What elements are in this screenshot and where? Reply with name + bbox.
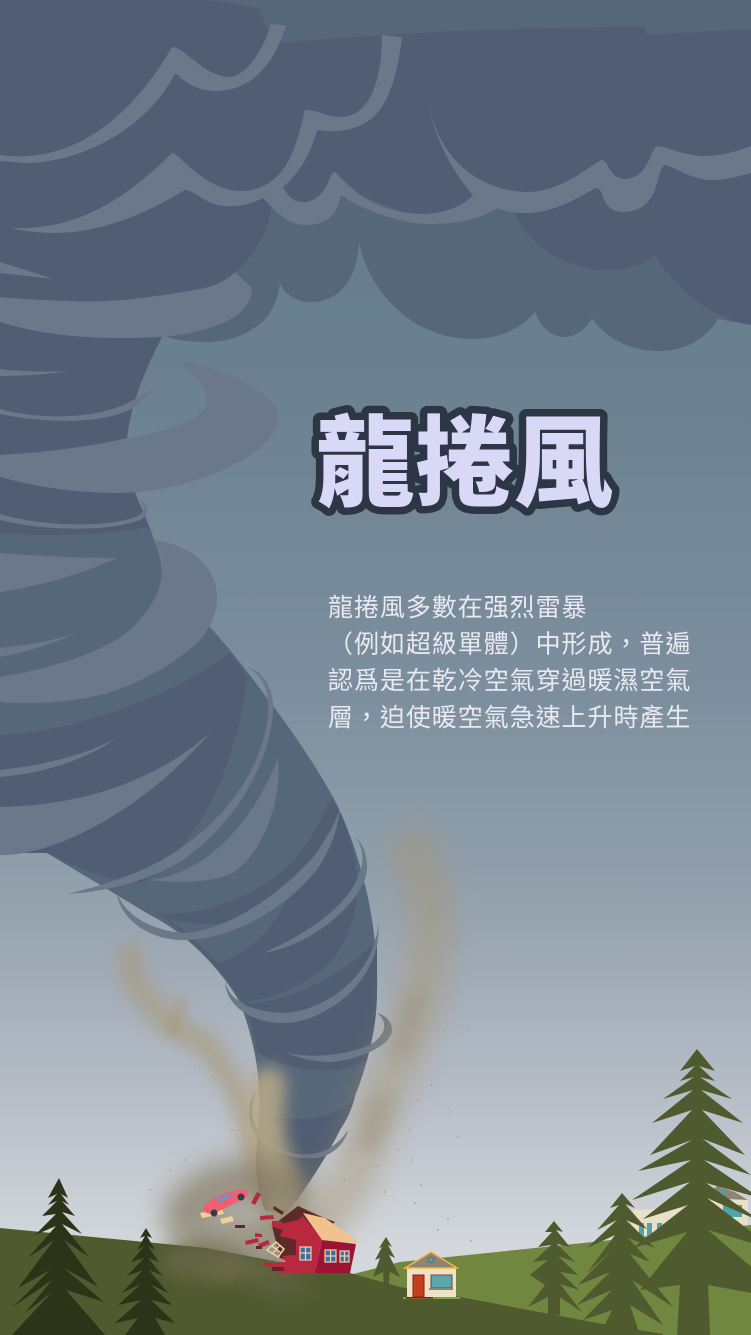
description text: （例如超級單體）中形成，普遍: [328, 630, 691, 658]
house interior: [272, 1206, 335, 1265]
funnel dark tip: [256, 1097, 355, 1215]
cloud base swirl band: [0, 272, 252, 338]
dust particles: [149, 841, 472, 1242]
storm cloud dark layer: [0, 0, 751, 325]
dark front hill: [0, 1228, 663, 1335]
description text: [328, 594, 691, 732]
swirl ring B: [117, 808, 340, 940]
flying bricks: [245, 1192, 288, 1270]
upper swirl disc: [0, 360, 278, 493]
small cottage: [403, 1252, 460, 1299]
cloud highlight ribbon: [10, 35, 751, 233]
second thin ring: [0, 500, 148, 529]
title: 龍捲風: [316, 408, 613, 519]
swirl ring C: [263, 837, 367, 953]
swirl ring A: [67, 667, 273, 894]
funnel wedge highlight: [0, 553, 117, 592]
swirl ring F: [249, 1090, 348, 1158]
ground smoke over hill: [160, 1242, 320, 1300]
description text: 認爲是在乾冷空氣穿過暖濕空氣: [328, 667, 691, 695]
funnel dark band A: [0, 653, 247, 883]
house roof: [303, 1213, 360, 1243]
tornado main funnel body: [0, 527, 377, 1215]
funnel thin wedge two: [0, 738, 117, 777]
tree: small green: [528, 1221, 582, 1315]
house right wall: [315, 1240, 356, 1273]
flying car: [200, 1190, 248, 1224]
cloud highlight crescent upper left: [0, 24, 286, 163]
tree: far left large: [12, 1178, 105, 1335]
house left wall: [270, 1216, 322, 1273]
description text: 層，迫使暖空氣急速上升時產生: [328, 704, 691, 732]
house windows: [300, 1247, 349, 1262]
funnel inner wedge: [165, 897, 287, 963]
tornado upper swirl thin wedge: [0, 369, 70, 376]
flying window: [267, 1242, 284, 1257]
description text: 龍捲風多數在强烈雷暴: [328, 594, 588, 622]
funnel wide highlight: [0, 730, 213, 855]
tree: large green: [632, 1049, 751, 1335]
background buildings: [630, 1186, 749, 1280]
tiny tree near house: [373, 1237, 400, 1290]
tree: medium green: [577, 1193, 673, 1335]
swirl ring D: [225, 923, 379, 1023]
destroyed red house: [235, 1192, 360, 1273]
upper thin ring: [0, 388, 152, 421]
cloud wedge highlight: [0, 262, 54, 279]
tree: left small: [115, 1228, 175, 1335]
funnel dark band B: [157, 800, 357, 1002]
funnel thin wedge: [0, 633, 77, 657]
funnel crescent highlight: [150, 758, 279, 882]
swirl ring E: [287, 1013, 392, 1062]
light green back hill: [330, 1225, 751, 1335]
dust plumes: [130, 850, 431, 1248]
lower swirl disc: [0, 540, 217, 703]
funnel dark band C: [243, 940, 377, 1070]
tornado upper funnel: [0, 290, 200, 600]
storm cloud back layer: [0, 0, 751, 351]
